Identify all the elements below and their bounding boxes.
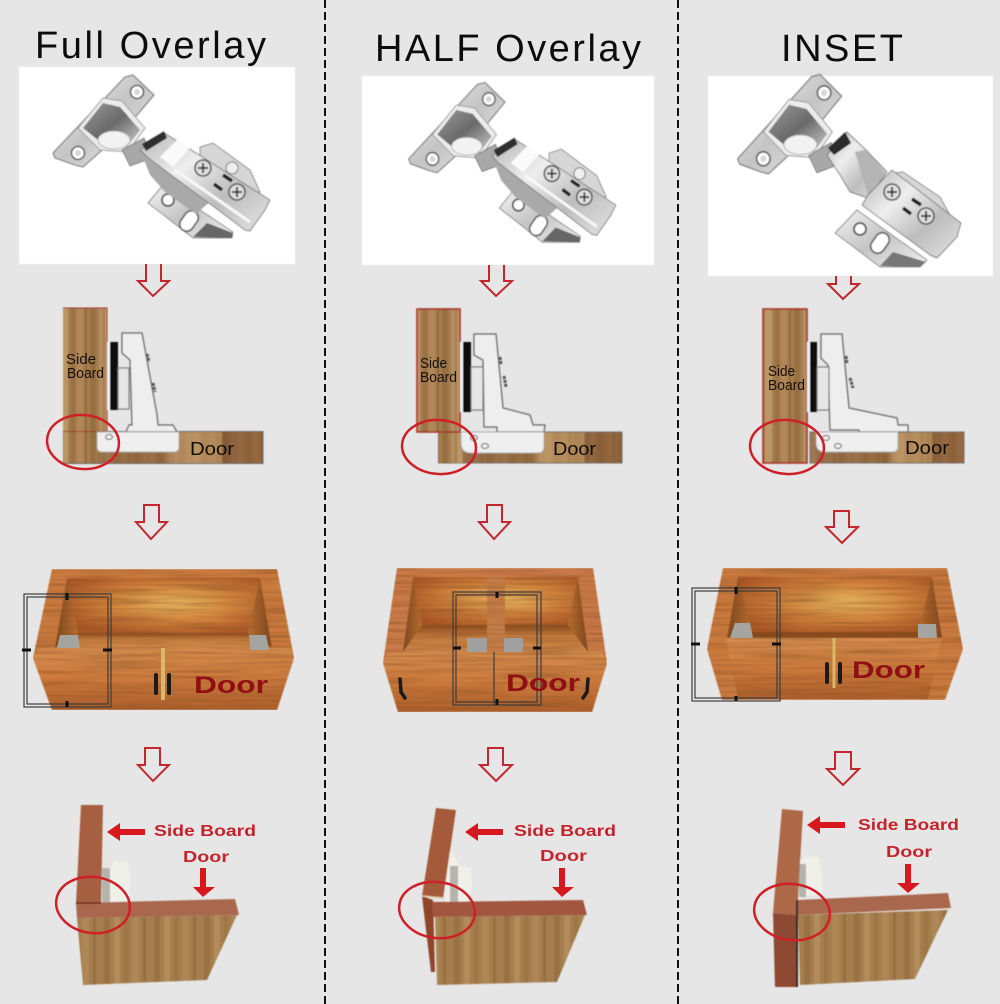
label: door: Door xyxy=(852,657,925,684)
arrow: hinge to section xyxy=(481,265,512,296)
overlay frame xyxy=(22,593,112,707)
label: door: Door xyxy=(886,844,932,861)
panel: hinge photo, half overlay xyxy=(362,76,654,265)
cross-section diagram, half overlay xyxy=(417,309,622,463)
callout ring: corner xyxy=(750,879,834,945)
cabinet, inset xyxy=(691,568,963,701)
arrow: section to cabinet xyxy=(479,505,510,539)
callout ring: full overlay joint xyxy=(45,412,121,472)
arrow: cabinet to corner xyxy=(480,748,512,781)
title: HALF Overlay: HALF Overlay xyxy=(375,28,641,70)
callout ring: half overlay joint xyxy=(400,417,478,477)
label: door: Door xyxy=(183,849,229,866)
cabinet blocks xyxy=(467,638,487,652)
arrow: cabinet to corner xyxy=(138,748,169,781)
label: side: Side xyxy=(66,352,96,368)
column: full overlay xyxy=(19,25,295,985)
panel: hinge photo, full overlay xyxy=(19,67,295,264)
arrow: hinge to section xyxy=(828,276,859,299)
cross-section diagram, full overlay xyxy=(63,308,263,464)
label arrow: door xyxy=(552,868,574,897)
arrow: section to cabinet xyxy=(826,511,858,543)
arrow: cabinet to corner xyxy=(827,752,859,785)
label: board: Board xyxy=(420,370,457,386)
label: door: Door xyxy=(553,439,596,459)
corner photo, full overlay xyxy=(76,805,239,985)
corner photo, inset xyxy=(773,809,951,987)
column: inset xyxy=(691,28,993,987)
label: side board: Side Board xyxy=(858,817,959,834)
label: board: Board xyxy=(67,366,104,382)
corner photo, half overlay xyxy=(422,808,587,985)
cabinet, full overlay xyxy=(22,569,294,710)
label: door: Door xyxy=(905,438,949,458)
arrow: hinge to section xyxy=(138,264,169,296)
panel: hinge photo, inset xyxy=(708,74,993,276)
callout ring: corner xyxy=(395,877,479,943)
label arrow: side board xyxy=(465,823,503,841)
label arrow: door xyxy=(897,864,920,893)
title: INSET: INSET xyxy=(781,28,903,70)
callout ring: corner xyxy=(52,872,134,938)
label: side board: Side Board xyxy=(514,823,616,840)
label: side: Side xyxy=(768,364,795,380)
label: side board: Side Board xyxy=(154,823,256,840)
label arrow: door xyxy=(193,868,215,897)
label arrow: side board xyxy=(807,816,845,834)
overlay frame xyxy=(691,587,781,701)
cabinet, half overlay xyxy=(383,568,607,712)
column: half overlay xyxy=(362,28,654,985)
cabinet blocks xyxy=(730,623,753,638)
label: door: Door xyxy=(506,670,580,697)
cross-section diagram, inset xyxy=(763,309,964,463)
label: door: Door xyxy=(540,848,587,865)
label arrow: side board xyxy=(107,823,145,841)
label: board: Board xyxy=(768,378,805,394)
title: Full Overlay: Full Overlay xyxy=(35,25,266,67)
label: door: Door xyxy=(190,439,234,459)
overlay frame xyxy=(453,592,541,705)
arrow: section to cabinet xyxy=(136,505,167,539)
callout ring: inset joint xyxy=(748,417,826,477)
label: door: Door xyxy=(194,672,268,699)
cabinet blocks xyxy=(57,635,80,648)
label: side: Side xyxy=(420,356,447,372)
